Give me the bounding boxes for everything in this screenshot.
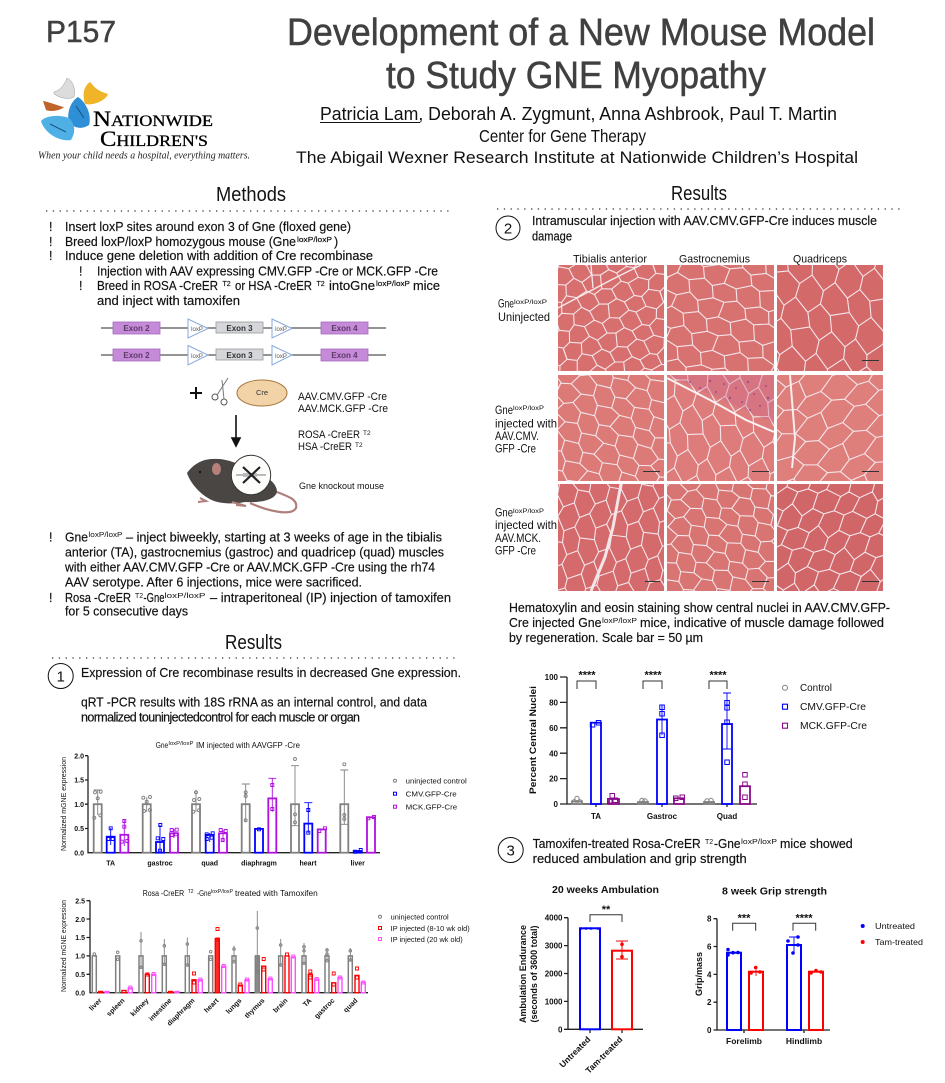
methods bullet list: ! [49, 235, 52, 249]
y axis: 1.5 [74, 778, 84, 784]
y axis: 2000 [545, 970, 563, 978]
y axis: 60 [549, 724, 559, 733]
result 2 heading: Intramuscular injection with AAV.CMV.GFP-Cre induces muscle [532, 214, 877, 228]
untreated bar [580, 928, 600, 1029]
result 1 text: qRT -PCR results with 18S rRNA as an internal control, and data [81, 696, 427, 710]
title: to Study GNE Myopathy [386, 55, 766, 97]
methods bullet list: loxP/loxP [376, 281, 410, 288]
histology row labels: AAV.CMV. [495, 429, 539, 443]
legend: Untreated [875, 921, 915, 931]
injection protocol text: loxP/loxP [88, 532, 123, 539]
floxed allele bottom [101, 346, 386, 365]
histology row labels: loxP/loxP [513, 508, 544, 515]
methods bullet list: ! [79, 264, 82, 278]
Cre vector and line labels: AAV.CMV.GFP -Cre [298, 391, 387, 403]
bar chart: 20 weeks ambulation [518, 884, 659, 1075]
rotated tissue labels: quad [343, 997, 359, 1014]
plus sign [190, 387, 202, 399]
legend: CMV.GFP-Cre [406, 790, 457, 798]
logo wordmark [38, 106, 250, 162]
significance brackets [577, 670, 727, 689]
y axis: 0 [707, 1026, 712, 1035]
histology row labels: AAV.MCK. [495, 531, 541, 545]
result 3 heading [498, 837, 853, 866]
result 3 heading: Tamoxifen-treated Rosa-CreER [533, 837, 701, 851]
legend [378, 914, 470, 944]
legend: Tam-treated [875, 937, 923, 947]
panel: gastrocnemius AAV.CMV with infiltrate [667, 375, 774, 481]
histology column headers: Quadriceps [793, 254, 847, 266]
category labels [726, 1036, 822, 1046]
injection protocol text: for 5 consecutive days [65, 604, 188, 618]
chart title [143, 889, 318, 898]
y axis: 2.5 [75, 898, 85, 906]
Cre vector and line labels: T2 [355, 442, 363, 449]
chart title: T2 [188, 889, 194, 895]
y axis: 0.0 [74, 850, 84, 858]
legend: uninjected control [391, 914, 449, 922]
chart title: Rosa -CreER [143, 889, 184, 898]
rotated tissue labels: lungs [225, 997, 243, 1016]
panel: gastrocnemius AAV.MCK [667, 484, 774, 591]
IP injected 20 wk bars [105, 957, 365, 993]
arrow down [232, 415, 240, 446]
rotated tissue labels: intestine [148, 997, 173, 1023]
y axis: 20 [549, 775, 559, 784]
floxed allele top: Exon 4 [331, 324, 358, 333]
floxed allele top: Exon 2 [123, 324, 150, 333]
category labels: Hindlimb [786, 1036, 822, 1046]
logo wordmark: NATIONWIDE [93, 106, 213, 131]
legend [861, 921, 923, 947]
y axis: 1.5 [75, 935, 85, 942]
significance brackets: *** [738, 912, 751, 924]
methods bullet list: Breed loxP/loxP homozygous mouse (Gne [65, 235, 296, 249]
y axis [707, 915, 830, 1035]
injection protocol text: T2 [135, 593, 143, 600]
result 1 text [48, 664, 461, 724]
injection protocol text: Gne [65, 530, 88, 544]
methods bullet list: intoGne [329, 279, 375, 293]
bars [94, 798, 375, 853]
heading: Results left: Results [225, 632, 282, 654]
poster number: P157 [46, 14, 116, 49]
legend [394, 776, 467, 812]
authors and affiliations: Patricia Lam, Deborah A. Zygmunt, Anna Ashbrook, Paul T. Martin [320, 103, 837, 124]
histology caption: Cre injected Gne [509, 616, 602, 630]
result 3 heading: mice showed [780, 837, 853, 851]
number badge 3 [498, 838, 523, 862]
histology row labels: Uninjected [498, 310, 550, 324]
number badge 1: 1 [57, 668, 65, 686]
result 1 text: normalized touninjectedcontrol for each muscle or organ [81, 710, 360, 724]
authors and affiliations: The Abigail Wexner Research Institute at Nationwide Children’s Hospital [296, 149, 858, 167]
chart title: loxP/loxP [168, 741, 194, 747]
IP injected 8-10 wk bars [99, 939, 359, 993]
methods bullet list: ! [49, 249, 52, 263]
methods bullet list: loxP/loxP [297, 237, 332, 244]
y axis label: Percent Central Nuclei [528, 686, 538, 794]
y axis: 100 [545, 673, 559, 682]
injection protocol text: Rosa -CreER [65, 591, 131, 605]
error bars [94, 766, 348, 852]
y axis: 4 [707, 970, 712, 979]
points and error bars [726, 935, 823, 976]
category labels: quad [201, 861, 218, 868]
y axis: 2 [707, 998, 712, 1007]
histology grid [400, 13, 945, 760]
significance bracket [590, 904, 622, 922]
data points [572, 700, 747, 804]
injection protocol text [49, 530, 451, 618]
injection protocol text: ! [49, 591, 52, 605]
error bars [662, 693, 731, 749]
y axis label: Normalized mGNE expression [61, 757, 68, 851]
Cre ellipse [237, 380, 287, 406]
error bar and points [580, 927, 628, 959]
injection protocol text: ! [49, 530, 52, 544]
methods bullet list: ! [79, 279, 82, 293]
legend: IP injected (20 wk old) [391, 937, 463, 944]
y axis: 0.5 [75, 972, 85, 979]
Cre vector and line labels: AAV.MCK.GFP -Cre [298, 403, 388, 415]
methods bullet list: ) [334, 235, 338, 249]
y axis: 1000 [545, 997, 563, 1006]
tam-treated bar [612, 951, 632, 1029]
histology row labels: GFP -Cre [495, 544, 536, 558]
injection protocol text: – intraperitoneal (IP) injection of tamoxifen [210, 591, 451, 605]
chart title: IM injected with AAVGFP -Cre [196, 741, 301, 750]
floxed allele bottom: Exon 3 [226, 351, 253, 360]
floxed allele bottom: loxP [275, 354, 287, 360]
histology row labels: injected with [495, 518, 557, 532]
methods bullet list: or HSA -CreER [235, 279, 312, 293]
y axis labels [518, 925, 539, 1023]
histology caption: by regeneration. Scale bar = 50 µm [509, 631, 703, 645]
y axis: 2.0 [74, 754, 84, 760]
legend: IP injected (8-10 wk old) [391, 926, 470, 933]
category labels: gastroc [147, 861, 173, 868]
histology column headers: Tibialis anterior [573, 254, 647, 266]
Cre vector and line labels: T2 [363, 430, 371, 437]
y axis: 6 [707, 942, 712, 952]
histology caption [509, 601, 890, 645]
methods bullet list: T2 [316, 281, 325, 288]
y axis: 80 [549, 698, 559, 708]
number badge 2: 2 [504, 220, 512, 238]
category labels: TA [591, 812, 601, 821]
authors and affiliations: Center for Gene Therapy [479, 126, 646, 146]
chart title: treated with Tamoxifen [235, 889, 318, 898]
y axis: 3000 [545, 942, 563, 951]
rotated labels: Untreated [557, 1034, 592, 1069]
histology row labels [495, 296, 557, 558]
histology row labels: GFP -Cre [495, 442, 536, 456]
floxed allele top: Exon 3 [226, 324, 253, 333]
category labels: heart [299, 861, 317, 868]
bar chart: Gne IM injected with AAV GFP-Cre [61, 741, 467, 868]
methods bullet list: mice [413, 279, 440, 293]
y axis: 0.0 [75, 990, 85, 998]
significance brackets: **** [709, 670, 727, 682]
result 2 heading: damage [532, 230, 572, 244]
result 2 heading [496, 214, 877, 244]
histology row labels: Gne [498, 296, 514, 310]
Cre vector and line labels: ROSA -CreER [298, 429, 360, 441]
rotated tissue labels: heart [203, 997, 221, 1015]
number badge 3: 3 [507, 842, 515, 860]
result 3 heading: T2 [705, 839, 713, 846]
rotated tissue labels: thymus [244, 997, 266, 1020]
y axis: 1.0 [74, 802, 84, 809]
number badge 2 [496, 216, 520, 240]
y axis [74, 754, 380, 858]
data points [93, 758, 376, 853]
chart title: loxP/loxP [211, 889, 234, 895]
floxed allele top: loxP [191, 327, 203, 333]
title [287, 12, 875, 97]
result 3 heading: -Gne [714, 837, 741, 851]
bar chart: Rosa-CreER T2 Gne treated with tamoxifen [61, 889, 470, 1028]
icon: scissors [212, 378, 228, 405]
legend: uninjected control [406, 776, 467, 786]
authors and affiliations [296, 103, 858, 167]
bars [727, 945, 823, 1030]
result 3 heading: reduced ambulation and grip strength [533, 852, 747, 866]
y axis label: Grip/mass [694, 952, 704, 996]
y axis: 4000 [545, 914, 563, 923]
histology caption: Hematoxylin and eosin staining show central nuclei in AAV.CMV.GFP- [509, 601, 890, 615]
category labels: Forelimb [726, 1036, 762, 1046]
methods bullet list: Injection with AAV expressing CMV.GFP -Cre or MCK.GFP -Cre [97, 264, 438, 278]
rotated tissue labels: gastroc [314, 997, 336, 1020]
category labels: diaphragm [241, 861, 277, 868]
significance brackets [733, 912, 816, 931]
logo: Nationwide Children's [38, 78, 250, 162]
category labels: Gastroc [647, 812, 678, 821]
category labels [106, 861, 365, 868]
y axis labels: (seconds of 3600 total) [529, 926, 539, 1022]
rotated tissue labels: brain [272, 997, 289, 1015]
rotated tissue labels: liver [88, 997, 104, 1013]
y axis: 40 [549, 749, 559, 758]
injection protocol text: anterior (TA), gastrocnemius (gastroc) and quadricep (quad) muscles [65, 546, 444, 560]
methods bullet list: Breed in ROSA -CreER [97, 279, 218, 293]
panel: quadriceps AAV.CMV [777, 375, 883, 481]
floxed allele top: loxP [275, 327, 287, 333]
rotated labels: Tam-treated [583, 1034, 624, 1075]
histology row labels: injected with [495, 416, 557, 430]
y axis: 0 [554, 800, 559, 809]
histology row labels: loxP/loxP [514, 299, 547, 306]
rotated tissue labels [88, 997, 359, 1028]
heading: Methods: Methods [216, 184, 286, 206]
floxed allele bottom: Exon 2 [123, 351, 150, 360]
legend [782, 683, 867, 732]
category labels: Quad [717, 812, 737, 821]
result 3 heading: loxP/loxP [741, 839, 777, 846]
Cre ellipse: Cre [256, 388, 268, 397]
legend: MCK.GFP-Cre [406, 802, 457, 812]
methods bullet list: ! [49, 220, 52, 234]
title: Development of a New Mouse Model [287, 12, 875, 54]
panel: TA uninjected [558, 265, 664, 371]
histology row labels: Gne [495, 506, 513, 520]
y axis: 1.0 [75, 954, 85, 960]
y axis: 8 [707, 915, 712, 924]
rotated tissue labels: spleen [106, 997, 126, 1018]
icon: butterflies [41, 78, 108, 140]
methods bullet list: Insert loxP sites around exon 3 of Gne (floxed gene) [65, 220, 351, 234]
gene diagram [101, 319, 388, 512]
bar chart: 8 week grip strength [694, 886, 923, 1046]
y axis: 2.0 [75, 917, 85, 924]
histology caption: mice, indicative of muscle damage followed [640, 616, 884, 630]
number badge 1 [48, 664, 73, 688]
histology row labels: Gne [495, 403, 513, 417]
significance bracket: ** [602, 904, 611, 916]
rotated tissue labels: kidney [130, 997, 150, 1018]
y axis labels: Ambulation Endurance [518, 925, 528, 1023]
methods bullet list: and inject with tamoxifen [97, 294, 240, 308]
panel: quadriceps AAV.MCK [777, 484, 883, 591]
methods bullet list [49, 220, 440, 308]
histology column headers: Gastrocnemius [679, 254, 750, 266]
y axis [545, 914, 643, 1034]
significance brackets: **** [578, 670, 596, 682]
injection protocol text: – inject biweekly, starting at 3 weeks of age in the tibialis [126, 530, 442, 544]
icon: knockout mouse [187, 455, 296, 512]
error bars [141, 911, 350, 975]
floxed allele bottom: loxP [191, 354, 203, 360]
floxed allele top [101, 319, 386, 338]
logo wordmark: When your child needs a hospital, everything matters. [38, 150, 250, 162]
category labels [591, 812, 737, 821]
heading: Results right: Results [671, 183, 727, 205]
Cre vector and line labels [298, 391, 388, 453]
injection protocol text: AAV serotype. After 6 injections, mice were sacrificed. [65, 576, 362, 590]
bars [572, 720, 750, 804]
y axis: 0 [558, 1025, 563, 1034]
legend: Control [800, 683, 832, 694]
methods bullet list: Induce gene deletion with addition of Cre recombinase [65, 249, 373, 263]
rotated labels [557, 1034, 624, 1075]
histology row labels: loxP/loxP [513, 405, 544, 412]
bar chart: percent central nuclei [528, 670, 867, 821]
chart title: 20 weeks Ambulation [552, 884, 659, 896]
result 1 text: Expression of Cre recombinase results in decreased Gne expression. [81, 666, 461, 680]
logo wordmark: CHILDREN'S [100, 126, 208, 151]
y axis: 0.5 [74, 826, 84, 833]
control bars [92, 956, 352, 993]
panel: TA AAV.MCK [558, 484, 664, 591]
floxed allele bottom: Exon 4 [331, 351, 358, 360]
injection protocol text: loxP/loxP [164, 593, 206, 600]
chart title: Gne [156, 741, 169, 750]
y axis [75, 898, 368, 998]
data points [93, 927, 365, 989]
histology caption: loxP/loxP [602, 618, 637, 625]
significance brackets: **** [795, 912, 813, 924]
rotated tissue labels: diaphragm [166, 997, 196, 1028]
Cre vector and line labels: HSA -CreER [298, 441, 352, 453]
methods bullet list: T2 [222, 281, 231, 288]
category labels: liver [350, 861, 365, 868]
y axis label: Normalized mGNE expression [61, 900, 68, 992]
category labels: TA [106, 861, 115, 868]
panel: quadriceps uninjected [777, 265, 883, 371]
rotated tissue labels: TA [302, 997, 313, 1009]
panel: gastrocnemius uninjected [667, 265, 774, 371]
injection protocol text: with either AAV.CMV.GFP -Cre or AAV.MCK.GFP -Cre using the rh74 [64, 560, 435, 574]
legend: CMV.GFP-Cre [800, 702, 866, 713]
panel: TA AAV.CMV [558, 375, 664, 481]
mouse caption: Gne knockout mouse [299, 481, 384, 492]
chart title: -Gne [197, 889, 211, 898]
chart title: 8 week Grip strength [722, 886, 827, 898]
significance brackets: **** [644, 670, 662, 682]
legend: MCK.GFP-Cre [800, 721, 867, 732]
histology column headers [573, 254, 847, 266]
y axis [545, 673, 757, 809]
injection protocol text: -Gne [144, 591, 165, 605]
